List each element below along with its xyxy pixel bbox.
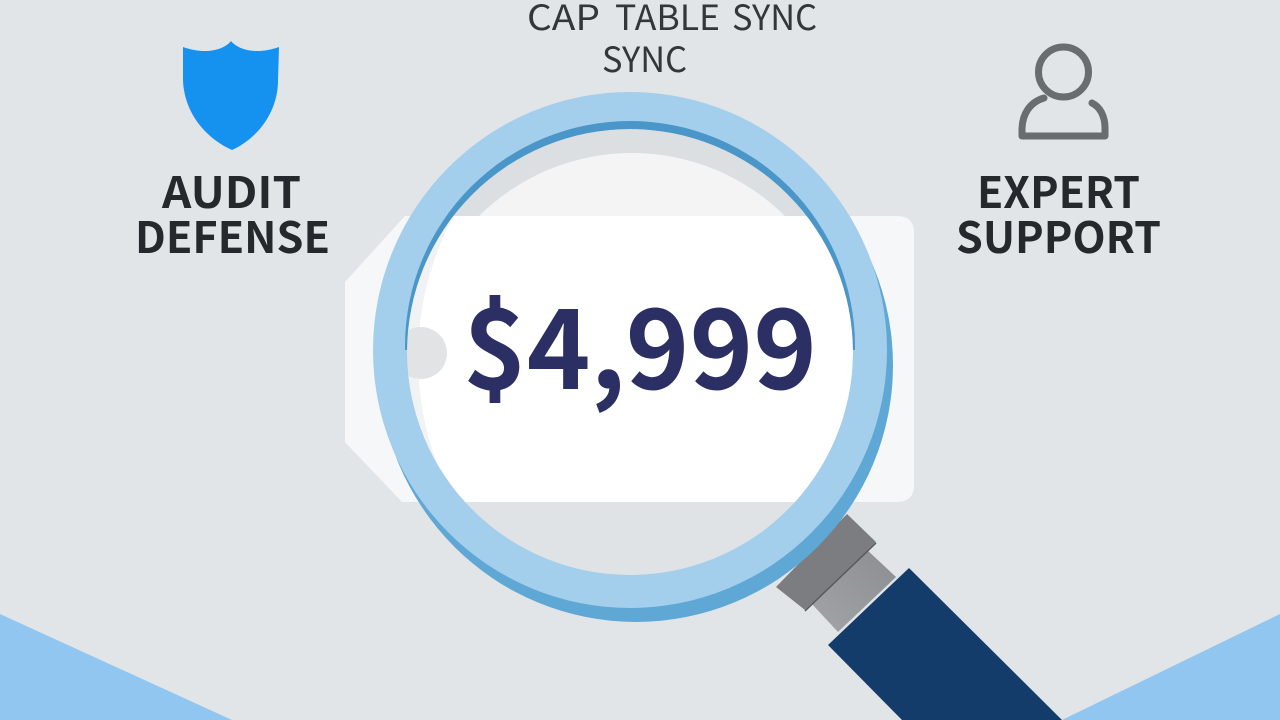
left corner shape bbox=[0, 614, 232, 720]
heading: cap table sync bbox=[527, 0, 817, 83]
label: expert support: SUPPORT bbox=[956, 204, 1161, 266]
magnifier ring shadow bbox=[379, 108, 893, 622]
price tag bbox=[345, 216, 914, 502]
heading: cap table sync: SYNC bbox=[602, 32, 687, 83]
magnifier handle bbox=[776, 514, 1062, 720]
label: expert support bbox=[956, 159, 1161, 266]
ring inner edge bbox=[405, 121, 855, 350]
label: expert support: EXPERT bbox=[977, 159, 1140, 221]
label: audit defense bbox=[135, 159, 330, 266]
icon: person bbox=[1022, 47, 1105, 136]
label: audit defense: DEFENSE bbox=[135, 204, 330, 266]
icon: shield bbox=[183, 41, 279, 150]
magnifier lens bbox=[407, 129, 853, 575]
price: $4,999 bbox=[463, 260, 817, 421]
right corner shape bbox=[1062, 614, 1280, 720]
label: audit defense: AUDIT bbox=[161, 159, 301, 221]
magnifier ring bbox=[373, 92, 887, 608]
